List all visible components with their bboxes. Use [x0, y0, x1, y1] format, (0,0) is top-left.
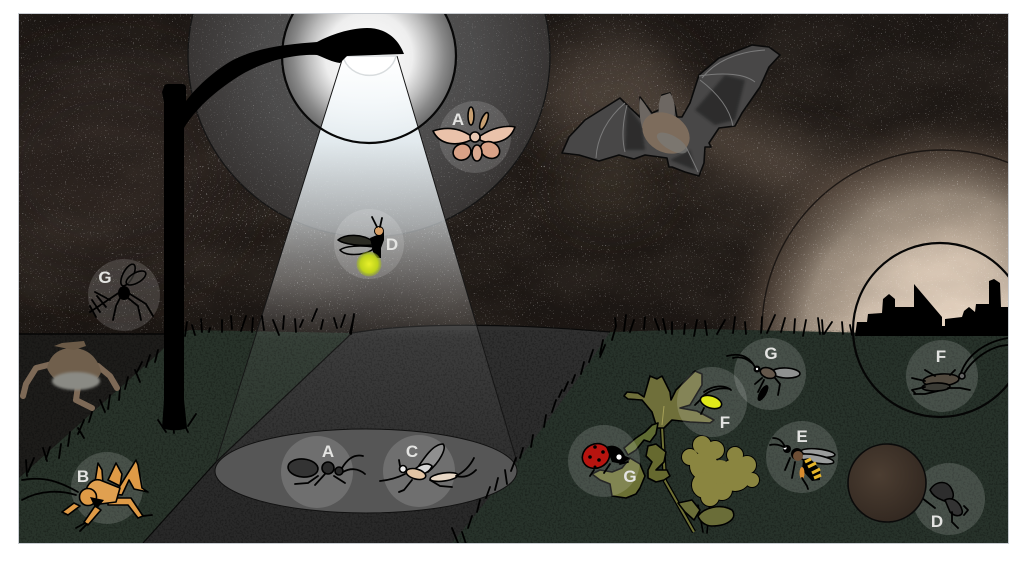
plant — [592, 371, 760, 533]
species bubble: C mayfly — [380, 435, 476, 507]
light beam — [230, 58, 502, 436]
species bubble: D firefly — [334, 209, 404, 279]
species bubble: E wasp — [766, 421, 838, 493]
species bubble: A ground beetle — [281, 436, 365, 508]
city light outer ring — [762, 149, 1008, 330]
species bubble: G mosquito: G — [98, 268, 112, 287]
sky stars over lamp zone — [188, 14, 550, 239]
species bubble: B cricket: B — [77, 467, 89, 486]
lamp bulb — [343, 56, 396, 75]
lamp light outer zone — [188, 0, 550, 237]
inner lamp glow zone — [283, 14, 455, 127]
species bubble: F firefly — [677, 367, 747, 437]
species bubble: C mayfly: C — [406, 442, 418, 461]
ground grain — [19, 330, 1008, 543]
inner lamp ring — [282, 0, 456, 143]
species bubble: A ground beetle: A — [322, 442, 334, 461]
horizon line at left — [19, 333, 168, 335]
toad — [23, 341, 117, 408]
city light inner ring — [853, 243, 1024, 417]
species bubble: F firefly: F — [720, 413, 730, 432]
street lamp — [162, 28, 404, 430]
species bubble: D dung beetle — [913, 463, 985, 535]
species bubble: G true bug: G — [764, 344, 778, 363]
species bubble: A moth — [433, 101, 515, 173]
species bubble: F cricket: F — [936, 347, 946, 366]
species bubble: G true bug — [727, 338, 806, 410]
species bubble: F cricket — [906, 338, 1008, 412]
species bubble: G mosquito — [88, 259, 160, 331]
species bubble: B cricket — [22, 452, 152, 531]
ground: grass left — [19, 330, 350, 543]
ground: grass right — [440, 329, 1008, 543]
city light inner ring fill — [854, 244, 1008, 332]
grass tufts — [26, 309, 852, 544]
night sky background — [0, 14, 1008, 354]
ground: dark wetland at left — [19, 335, 160, 478]
bat — [562, 45, 780, 176]
species bubble: E wasp: E — [796, 427, 808, 446]
species bubble: A moth: A — [452, 110, 464, 129]
ground: road — [143, 325, 610, 543]
lit pool ellipse on road — [215, 429, 517, 513]
dung ball — [848, 444, 926, 522]
species bubble: G ladybug: G — [623, 467, 637, 486]
species bubble: G ladybug — [568, 425, 640, 497]
species bubble: D firefly: D — [386, 235, 398, 254]
city skyline — [855, 279, 1008, 336]
species bubble: D dung beetle: D — [931, 512, 943, 531]
road edge lines — [143, 325, 610, 543]
light beam edges — [216, 56, 517, 462]
